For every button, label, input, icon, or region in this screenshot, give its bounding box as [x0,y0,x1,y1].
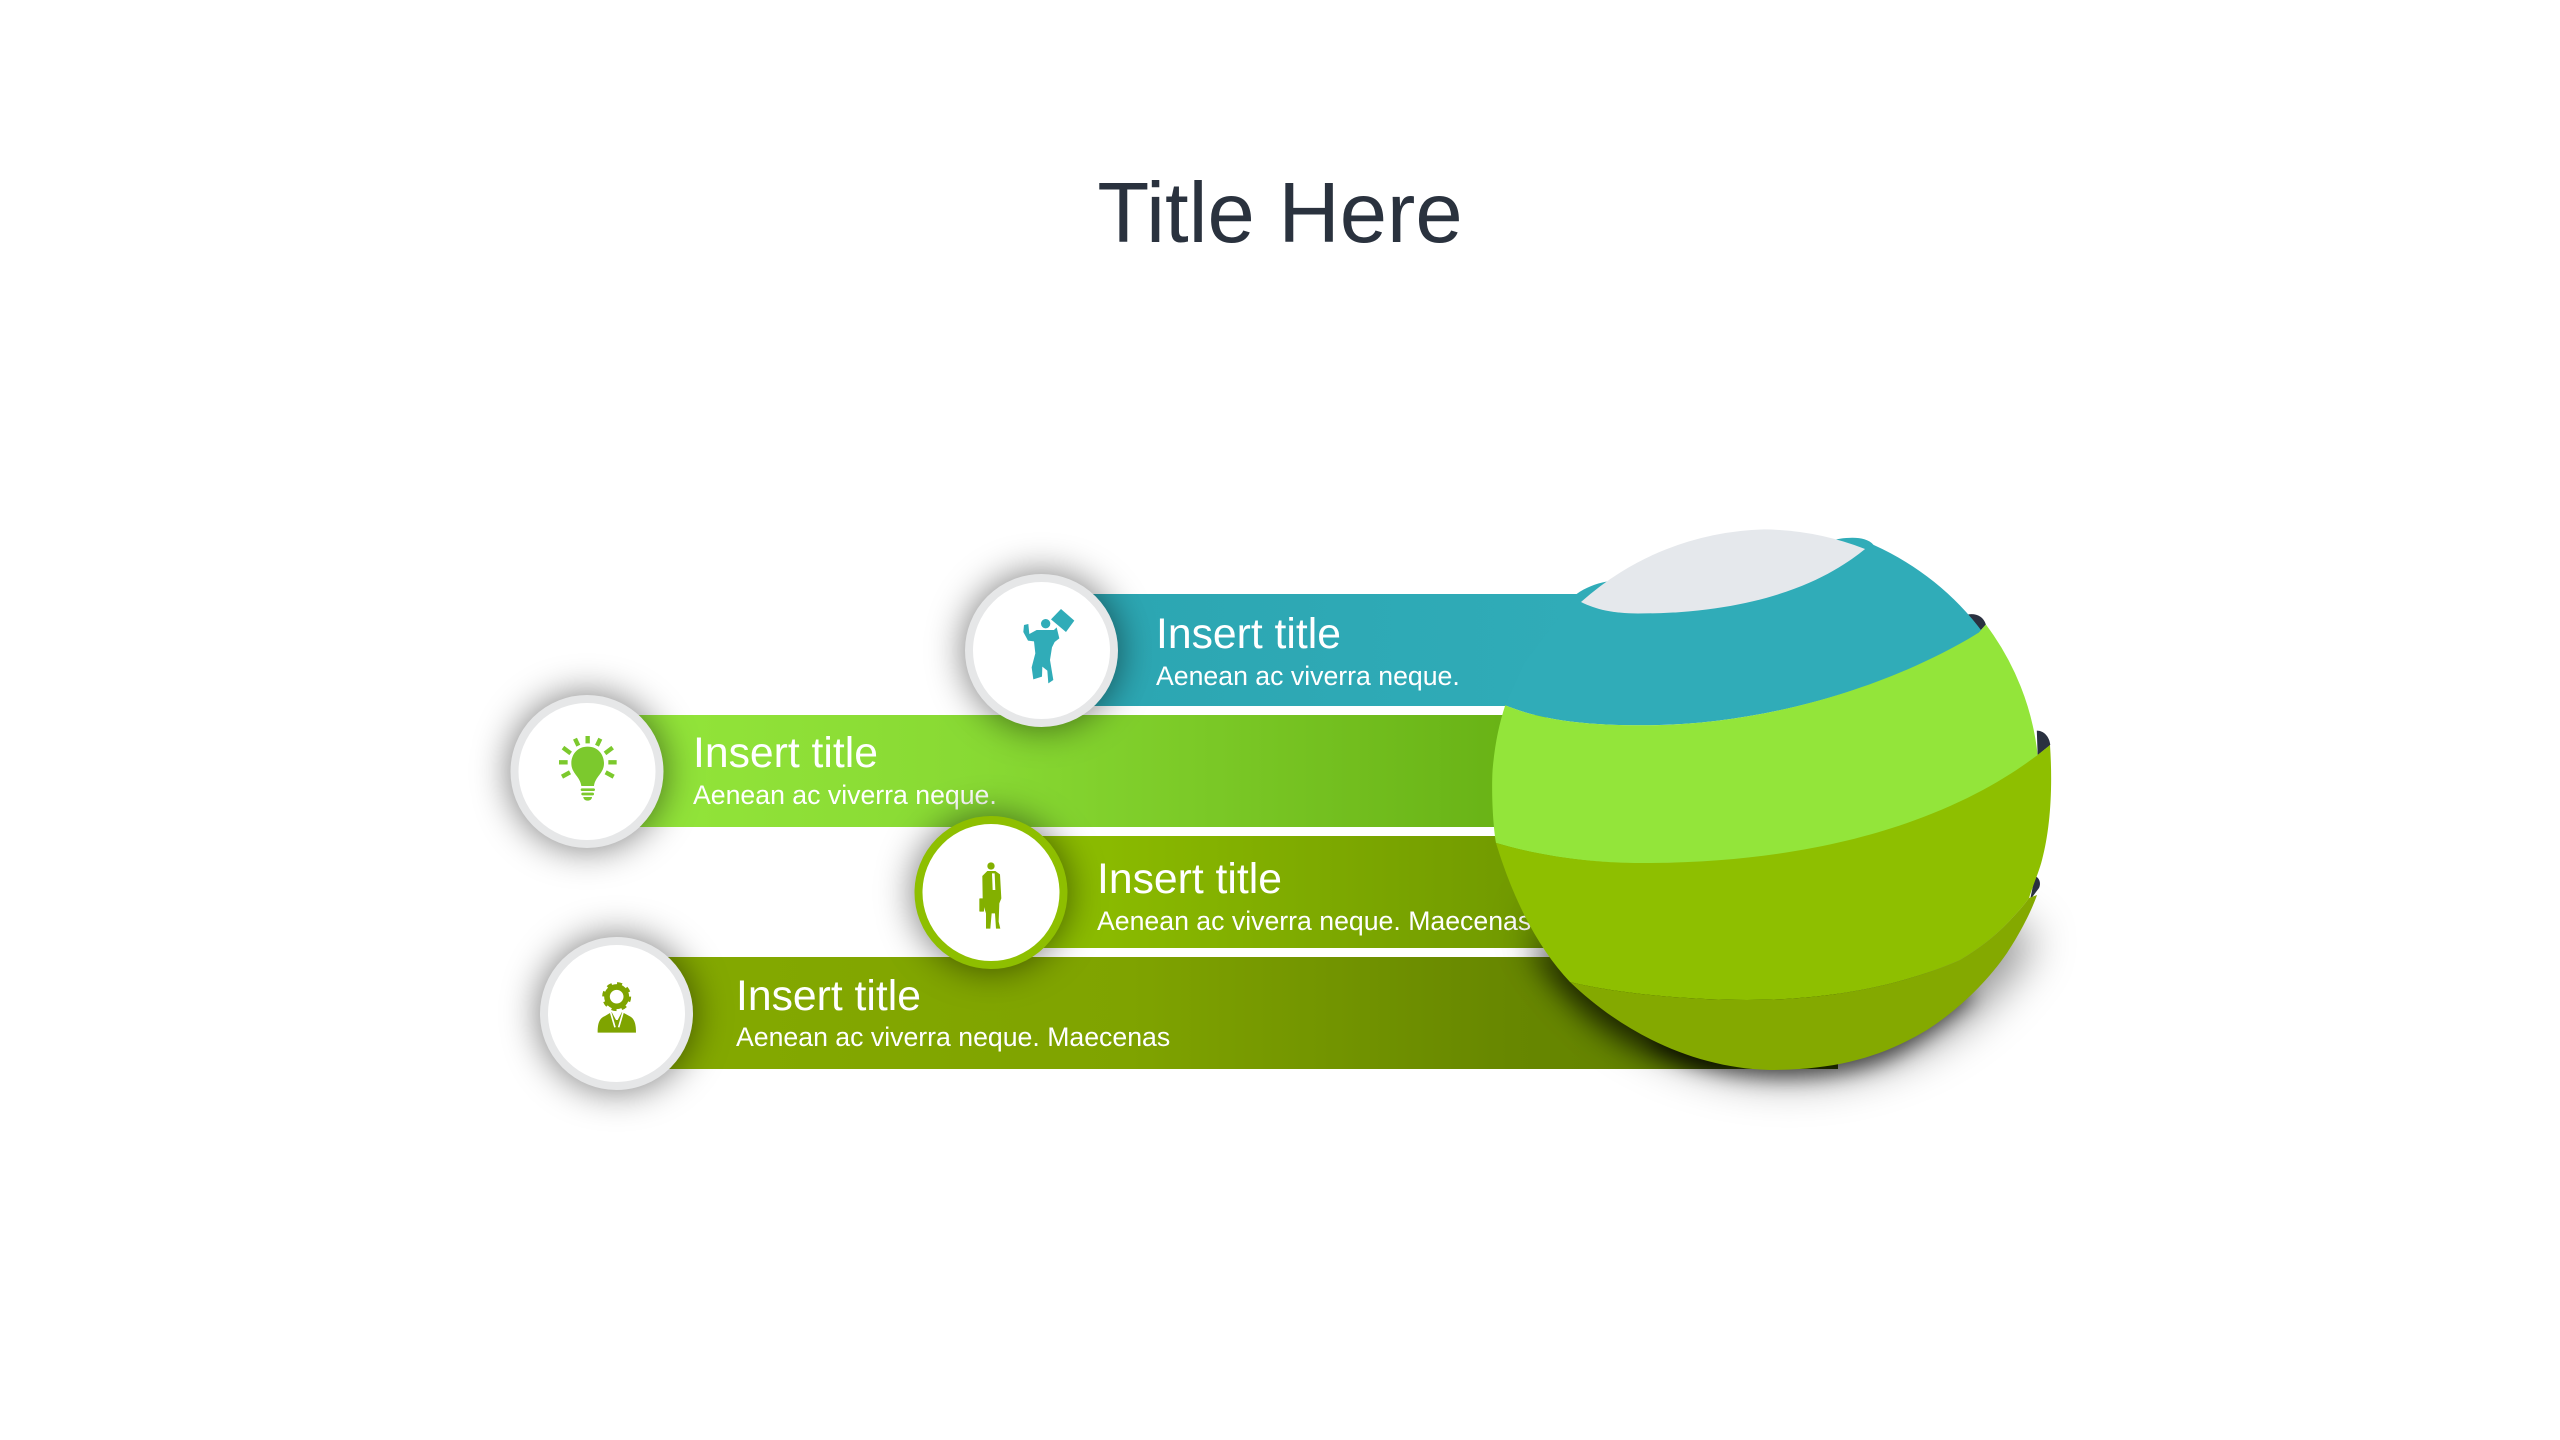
icon: cheering person with briefcase [1023,609,1074,683]
bar: light green [586,715,1546,827]
text: light green bar [693,729,997,810]
sphere [1492,529,2051,1078]
text: teal bar: Insert title [1156,610,1341,658]
circle: teal jumping person [964,572,1120,728]
text: dark olive bar [736,972,1170,1052]
dark edge tab: lower [2030,876,2040,900]
cap: light grey [1581,529,1865,613]
sphere upper pieces [1492,529,2050,863]
band: teal [1505,538,1983,725]
text: olive bar: Aenean ac viverra neque. Maecenas [1097,906,1531,936]
icon: businessman with briefcase [979,862,1001,929]
title: Title Here [1097,166,1463,261]
circle: olive standing businessman [913,814,1069,970]
text: olive bar [1097,855,1531,936]
text: dark olive bar: Aenean ac viverra neque. Maecenas [736,1022,1170,1052]
band: dark olive [1570,895,2037,1070]
circle: light green bulb [509,694,665,850]
bar: olive green [990,836,1590,948]
icon: light bulb [559,736,617,801]
band: olive [1496,745,2051,1000]
text: teal bar: Aenean ac viverra neque. [1156,661,1460,691]
circle: dark olive gear person [538,936,694,1092]
bar: dark olive [616,957,1838,1069]
text: teal bar [1156,610,1460,691]
text: light green bar: Insert title [693,729,878,777]
dark edge tabs [1964,614,2050,755]
sphere shadow [1530,800,2036,1078]
band: light green [1492,624,2038,863]
text: dark olive bar: Insert title [736,972,921,1020]
bar: teal [1040,594,1660,706]
icon: gear head person [598,984,636,1033]
text: olive bar: Insert title [1097,855,1282,903]
text: light green bar: Aenean ac viverra neque. [693,780,997,810]
